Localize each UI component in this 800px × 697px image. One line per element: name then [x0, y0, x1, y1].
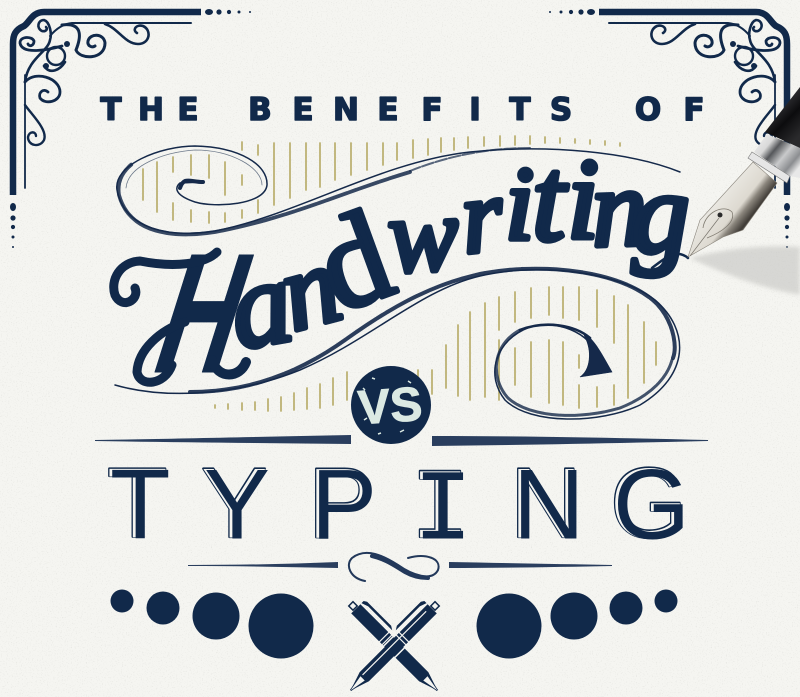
word: typing: N — [510, 447, 582, 558]
badge: vs: VS — [356, 378, 424, 435]
word: typing: I — [410, 455, 470, 568]
script title: Handwriting: n — [590, 146, 649, 270]
icon: fountain pen — [688, 87, 800, 295]
script title: Handwriting: r — [455, 155, 509, 276]
dots: left — [110, 590, 314, 658]
word: typing: Y — [201, 447, 267, 558]
word: typing: G — [610, 447, 687, 558]
rule: upper pair — [95, 435, 708, 446]
yellow hatching behind flourishes — [143, 136, 656, 411]
flourish: lower swirl — [115, 269, 680, 419]
word: typing — [107, 447, 690, 570]
word: typing: P — [311, 448, 377, 560]
script title: Handwriting — [114, 133, 690, 409]
script title: Handwriting: t — [532, 133, 568, 266]
rule: lower pair with squiggle — [188, 553, 612, 581]
word: typing: T — [110, 448, 170, 560]
word: typing: N — [513, 448, 584, 560]
word: typing: G — [610, 447, 687, 558]
script title: Handwriting: i — [505, 145, 534, 262]
word: typing: P — [308, 447, 374, 558]
script title: Handwriting: d — [299, 183, 409, 340]
word: typing: I — [410, 455, 470, 568]
word: typing: G — [613, 448, 690, 560]
dots: right — [476, 590, 678, 658]
word: typing: T — [107, 447, 167, 558]
script title: Handwriting: g — [632, 150, 690, 277]
badge: vs — [351, 366, 431, 444]
corner ornament: top left — [10, 9, 251, 248]
script title: Handwriting: n — [268, 222, 352, 354]
flourish: upper swirl — [117, 146, 680, 234]
word: typing: Y — [204, 448, 270, 560]
script title: Handwriting: H — [146, 219, 261, 409]
script title: Handwriting: w — [385, 174, 461, 295]
word: typing: Y — [201, 447, 267, 558]
word: typing: T — [107, 447, 168, 558]
word: typing: I — [413, 456, 473, 570]
word: typing: N — [510, 447, 582, 558]
icon: crossed pens — [342, 595, 446, 696]
script title: Handwriting: a — [219, 233, 302, 375]
heading: the benefits of: THEBENEFITSOF — [100, 92, 705, 128]
word: typing: P — [308, 447, 374, 558]
corner ornament: top right — [549, 9, 790, 248]
script title: Handwriting: i — [567, 136, 599, 263]
